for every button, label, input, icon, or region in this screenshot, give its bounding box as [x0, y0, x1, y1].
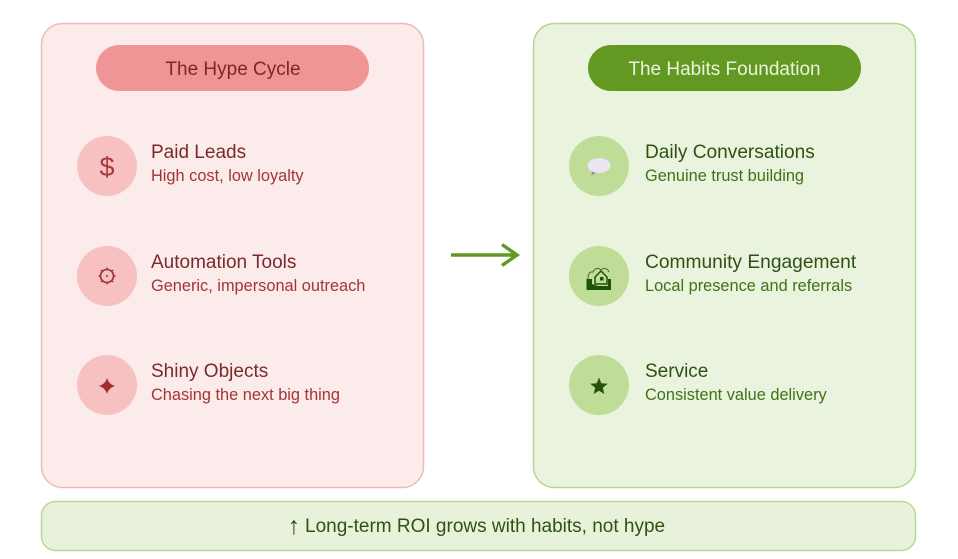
item: daily conversations: Daily Conversations [645, 142, 815, 163]
item: shiny objects [77, 355, 340, 415]
item: paid leads [77, 136, 304, 196]
callout: long-term roi: ↑ [288, 512, 300, 540]
item: community engagement: Local presence and referrals [645, 277, 852, 295]
item: daily conversations: Genuine trust building [645, 167, 804, 185]
item: automation tools: Automation Tools [151, 252, 296, 273]
heading: the hype cycle [96, 45, 369, 91]
item: shiny objects: Shiny Objects [151, 361, 268, 382]
item: automation tools: Generic, impersonal outreach [151, 277, 365, 295]
callout: long-term roi [42, 502, 916, 550]
arrow: hype to habits [451, 244, 517, 266]
callout: long-term roi: Long-term ROI grows with habits, not hype [305, 516, 665, 537]
panel: the habits foundation [534, 24, 916, 488]
item: service [569, 355, 828, 415]
item: paid leads: High cost, low loyalty [151, 167, 304, 185]
heading: the hype cycle: The Hype Cycle [165, 59, 301, 80]
heading: the habits foundation: The Habits Foundation [628, 59, 821, 80]
item: automation tools [77, 246, 365, 306]
heading: the habits foundation [588, 45, 861, 91]
item: daily conversations [569, 136, 815, 196]
item: shiny objects: Chasing the next big thing [151, 386, 340, 404]
item: community engagement [569, 246, 857, 306]
item: paid leads: $ [99, 152, 115, 182]
item: service: Consistent value delivery [645, 386, 828, 404]
item: community engagement: Community Engagement [645, 252, 857, 273]
item: service: Service [645, 361, 708, 382]
item: paid leads: Paid Leads [151, 142, 246, 163]
panel: the hype cycle [42, 24, 424, 488]
